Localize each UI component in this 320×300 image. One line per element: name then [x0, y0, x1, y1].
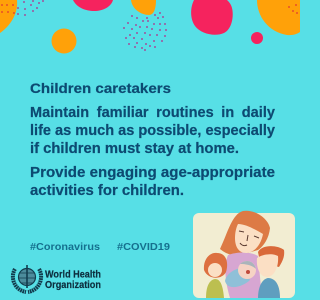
illustration: mother and children	[193, 211, 295, 298]
WHO wordmark	[45, 268, 101, 291]
red circle	[251, 32, 263, 44]
orange blob: top left	[0, 0, 17, 33]
orange circle	[52, 28, 76, 54]
boy on right	[257, 246, 284, 298]
mother's face	[235, 224, 263, 253]
mother's hair	[220, 211, 270, 255]
hashtag: Coronavirus: #Coronavirus	[30, 241, 100, 253]
dots on corner blob	[288, 4, 298, 14]
WHO wordmark: Organization	[45, 279, 101, 291]
girl on left	[204, 253, 227, 298]
body paragraph: routines: Maintain familiar routines in daily	[30, 105, 275, 121]
WHO wordmark: World Health	[45, 268, 101, 280]
heading: Children caretakers	[30, 81, 171, 96]
mother's facial features	[239, 231, 259, 246]
red blob: top centre	[73, 0, 113, 11]
dots on top-left blob	[1, 4, 15, 14]
orange blob: top right corner	[257, 0, 300, 35]
body paragraph: activities	[30, 165, 275, 199]
WHO logo emblem	[13, 265, 41, 292]
illustration backdrop	[193, 213, 295, 298]
body paragraph: activities: activities for children.	[30, 183, 184, 199]
body paragraph: routines: life as much as possible, especially	[30, 123, 275, 139]
body paragraph: routines: if children must stay at home.	[30, 141, 239, 157]
orange blob: top middle	[131, 0, 156, 15]
red blob: top right	[191, 0, 233, 35]
body paragraph: activities: Provide engaging age-appropriate	[30, 165, 275, 181]
body paragraph: routines	[30, 105, 275, 157]
mother's body	[225, 252, 262, 298]
dot cluster: top left	[17, 0, 44, 16]
hashtag: COVID19: #COVID19	[117, 241, 170, 253]
baby	[225, 261, 256, 287]
dot cluster: middle right	[123, 12, 167, 51]
